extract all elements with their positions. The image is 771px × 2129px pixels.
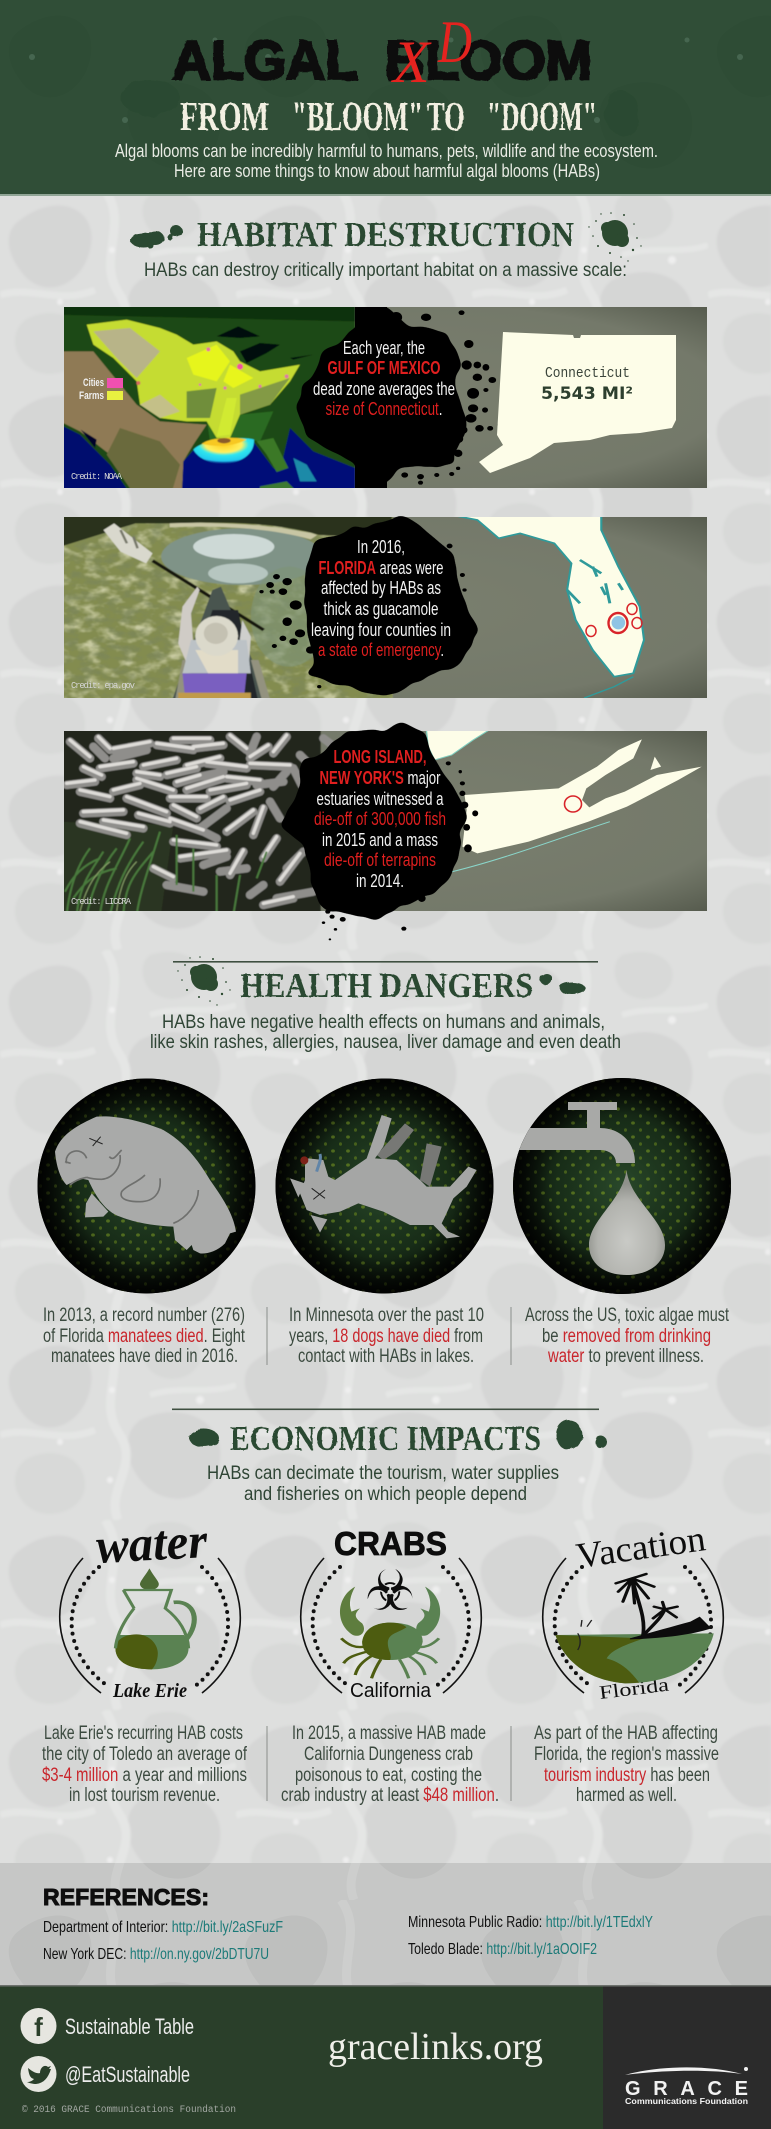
Connecticut map bbox=[479, 332, 676, 473]
icon: biohazard symbol: ☣ bbox=[365, 1559, 415, 1624]
subtitle: from bloom to doom bbox=[180, 93, 597, 139]
caption: years, 18 dogs have died from bbox=[289, 1326, 483, 1347]
caption: poisonous to eat, costing the bbox=[295, 1765, 482, 1786]
caption: In Minnesota over the past 10 bbox=[289, 1305, 484, 1326]
callout text: a state of emergency. bbox=[318, 640, 444, 660]
panel: Long Island bbox=[53, 722, 707, 940]
icon: faucet bbox=[519, 1102, 635, 1163]
reference links: Minnesota Public Radio: http://bit.ly/1TEdxlY bbox=[408, 1914, 653, 1931]
reference links: Department of Interior: http://bit.ly/2aSFuzF bbox=[43, 1919, 283, 1936]
ink blobs bbox=[130, 225, 182, 248]
icon: dead dog bbox=[290, 1115, 477, 1238]
callout text: die-off of terrapins bbox=[324, 850, 436, 870]
intro text: Here are some things to know about harmful algal blooms (HABs) bbox=[174, 161, 600, 181]
caption: In 2013, a record number (276) bbox=[43, 1305, 245, 1326]
Connecticut label: Connecticut bbox=[545, 365, 630, 382]
die-off location marker bbox=[564, 796, 582, 812]
caption bbox=[42, 1723, 248, 1806]
Long Island map bbox=[426, 727, 702, 873]
caption: manatees have died in 2016. bbox=[51, 1346, 238, 1367]
icon: island scene bbox=[555, 1574, 714, 1683]
seal: California crabs: California bbox=[350, 1680, 432, 1702]
red correction: X and D: D bbox=[437, 9, 472, 75]
copyright: © 2016 GRACE Communications Foundation bbox=[22, 2104, 236, 2116]
Connecticut label: 5,543 MI² bbox=[541, 384, 633, 404]
icon: dead manatee bbox=[55, 1116, 236, 1253]
section heading: health dangers: HEALTH DANGERS bbox=[240, 966, 533, 1005]
caption: tourism industry has been bbox=[544, 1765, 710, 1786]
credit: Credit: NOAA bbox=[71, 472, 123, 482]
caption: the city of Toledo an average of bbox=[42, 1744, 248, 1765]
map legend: Cities bbox=[83, 377, 104, 389]
icon: twitter bbox=[20, 2056, 56, 2092]
caption bbox=[534, 1723, 719, 1806]
section heading: habitat destruction bbox=[130, 212, 642, 281]
title: Algal Bloom: BLOOM bbox=[385, 29, 592, 91]
seal: Florida vacation: Florida bbox=[598, 1675, 671, 1704]
seal: California crabs: CRABS bbox=[334, 1525, 447, 1562]
callout text: estuaries witnessed a bbox=[316, 789, 444, 809]
icon: water drop bbox=[589, 1170, 665, 1275]
economic column: crabs bbox=[281, 1525, 499, 1806]
nutrient basin bbox=[87, 320, 300, 438]
paddle bbox=[153, 561, 264, 630]
Florida map bbox=[443, 513, 644, 698]
reference links bbox=[43, 1914, 653, 1963]
caption bbox=[281, 1723, 499, 1806]
reference links: New York DEC: http://on.ny.gov/2bDTU7U bbox=[43, 1946, 269, 1963]
title: Algal Bloom bbox=[172, 29, 592, 91]
callout text bbox=[313, 338, 455, 419]
HAB location markers bbox=[586, 604, 642, 636]
satellite map bbox=[64, 307, 355, 488]
callout text: LONG ISLAND, bbox=[334, 747, 426, 767]
footer: Sustainable Table bbox=[65, 2014, 194, 2039]
icon: facebook: f bbox=[34, 2012, 43, 2042]
caption bbox=[525, 1305, 730, 1367]
footer bbox=[0, 1985, 771, 2129]
section heading: economic impacts: and fisheries on which people depend bbox=[244, 1484, 527, 1505]
references heading: REFERENCES: bbox=[43, 1884, 209, 1910]
callout text: FLORIDA areas were bbox=[318, 558, 444, 578]
section heading: health dangers bbox=[150, 956, 621, 1053]
ink splatter bbox=[588, 212, 642, 262]
caption bbox=[289, 1305, 484, 1367]
red correction: X and D bbox=[391, 9, 472, 95]
circle backdrop bbox=[38, 1078, 256, 1294]
dead zone bbox=[193, 438, 254, 464]
credit: Credit: LICCRA bbox=[71, 897, 132, 907]
panel: Gulf of Mexico bbox=[64, 307, 707, 488]
caption bbox=[43, 1305, 246, 1367]
icon: pitcher of algae water bbox=[115, 1568, 194, 1669]
caption: be removed from drinking bbox=[542, 1326, 711, 1347]
ink blot bbox=[259, 514, 477, 698]
panel: Florida bbox=[50, 510, 707, 707]
section heading: economic impacts: HABs can decimate the tourism, water supplies bbox=[207, 1463, 559, 1484]
reference links: Toledo Blade: http://bit.ly/1aOOIF2 bbox=[408, 1941, 597, 1958]
caption: As part of the HAB affecting bbox=[534, 1723, 718, 1744]
section heading: habitat destruction: HABITAT DESTRUCTION bbox=[197, 215, 574, 254]
caption: $3-4 million a year and millions bbox=[42, 1765, 247, 1786]
footer: @EatSustainable bbox=[65, 2062, 190, 2087]
ink blobs bbox=[540, 973, 585, 994]
grass bbox=[65, 832, 267, 915]
icon: crab bbox=[340, 1587, 440, 1678]
section heading: habitat destruction: HABs can destroy critically important habitat on a massive scale: bbox=[144, 260, 627, 281]
callout text: thick as guacamole bbox=[324, 599, 438, 619]
caption: California Dungeness crab bbox=[304, 1744, 473, 1765]
map legend: Farms bbox=[79, 390, 104, 402]
Connecticut label bbox=[542, 366, 632, 402]
callout text: Each year, the bbox=[343, 338, 425, 358]
callout text: GULF OF MEXICO bbox=[328, 358, 440, 378]
seal: Lake Erie water bbox=[60, 1512, 240, 1702]
ink blot bbox=[296, 307, 498, 488]
caption: contact with HABs in lakes. bbox=[298, 1346, 474, 1367]
health column: manatee bbox=[38, 1078, 256, 1367]
website: gracelinks.org bbox=[328, 2026, 543, 2068]
economic column: vacation bbox=[534, 1518, 723, 1806]
callout text: leaving four counties in bbox=[311, 620, 451, 640]
paddler bbox=[178, 587, 200, 663]
subtitle: from bloom to doom: "DOOM" bbox=[487, 93, 597, 139]
seal: Lake Erie water: Lake Erie bbox=[112, 1680, 187, 1702]
icon: facebook bbox=[20, 2008, 56, 2044]
GRACE logo: Communications Foundation bbox=[625, 2096, 748, 2106]
seal: California crabs bbox=[301, 1525, 481, 1702]
map legend bbox=[80, 378, 123, 400]
callout text: affected by HABs as bbox=[321, 578, 441, 598]
callout text: in 2014. bbox=[356, 871, 404, 891]
callout text: dead zone averages the bbox=[313, 379, 455, 399]
intro text bbox=[115, 141, 658, 181]
callout text: size of Connecticut. bbox=[326, 399, 442, 419]
callout text: die-off of 300,000 fish bbox=[314, 809, 446, 829]
callout text: In 2016, bbox=[357, 537, 405, 557]
header band bbox=[0, 0, 771, 196]
seal: Florida vacation: Vacation bbox=[574, 1518, 708, 1576]
intro text: Algal blooms can be incredibly harmful to humans, pets, wildlife and the ecosystem. bbox=[115, 141, 658, 161]
ink blot bbox=[281, 724, 478, 940]
health column: dog bbox=[276, 1078, 494, 1367]
GRACE logo bbox=[625, 2067, 748, 2106]
seal: Florida vacation bbox=[543, 1518, 723, 1704]
caption: crab industry at least $48 million. bbox=[281, 1785, 499, 1806]
red correction: X and D: X bbox=[391, 29, 432, 95]
caption: in lost tourism revenue. bbox=[69, 1785, 220, 1806]
ink blobs bbox=[189, 1420, 607, 1450]
canoe bbox=[172, 586, 262, 698]
section heading: health dangers: like skin rashes, allergies, nausea, liver damage and even death bbox=[150, 1032, 621, 1053]
caption: Lake Erie's recurring HAB costs bbox=[44, 1723, 243, 1744]
caption: water to prevent illness. bbox=[547, 1346, 704, 1367]
caption: harmed as well. bbox=[576, 1785, 677, 1806]
seal: Lake Erie water: water bbox=[95, 1512, 209, 1574]
credit: Credit: epa.gov bbox=[71, 681, 136, 691]
caption: of Florida manatees died. Eight bbox=[43, 1326, 246, 1347]
subtitle: from bloom to doom: TO bbox=[427, 93, 465, 139]
caption: Florida, the region's massive bbox=[534, 1744, 719, 1765]
subtitle: from bloom to doom: FROM bbox=[180, 93, 269, 139]
economic column: water bbox=[42, 1512, 248, 1806]
callout text bbox=[311, 537, 451, 660]
seat bbox=[182, 673, 247, 693]
header ink blots bbox=[120, 80, 639, 135]
kayak photo bbox=[64, 517, 394, 698]
health column: tap water bbox=[500, 1078, 731, 1367]
section heading: economic impacts: ECONOMIC IMPACTS bbox=[230, 1419, 541, 1458]
references band bbox=[0, 1863, 771, 1986]
caption: In 2015, a massive HAB made bbox=[292, 1723, 486, 1744]
section heading: health dangers: HABs have negative health effects on humans and animals, bbox=[162, 1012, 605, 1033]
callout text bbox=[314, 747, 446, 891]
section heading: economic impacts bbox=[172, 1408, 607, 1505]
subtitle: from bloom to doom: "BLOOM" bbox=[292, 93, 423, 139]
callout text: in 2015 and a mass bbox=[322, 830, 438, 850]
circle backdrop bbox=[276, 1078, 494, 1294]
callout text: NEW YORK'S major bbox=[320, 768, 441, 788]
title: Algal Bloom: ALGAL bbox=[172, 29, 358, 91]
circle backdrop bbox=[513, 1078, 731, 1294]
fish die-off photo bbox=[64, 731, 334, 911]
GRACE logo: GRACE bbox=[625, 2078, 748, 2100]
